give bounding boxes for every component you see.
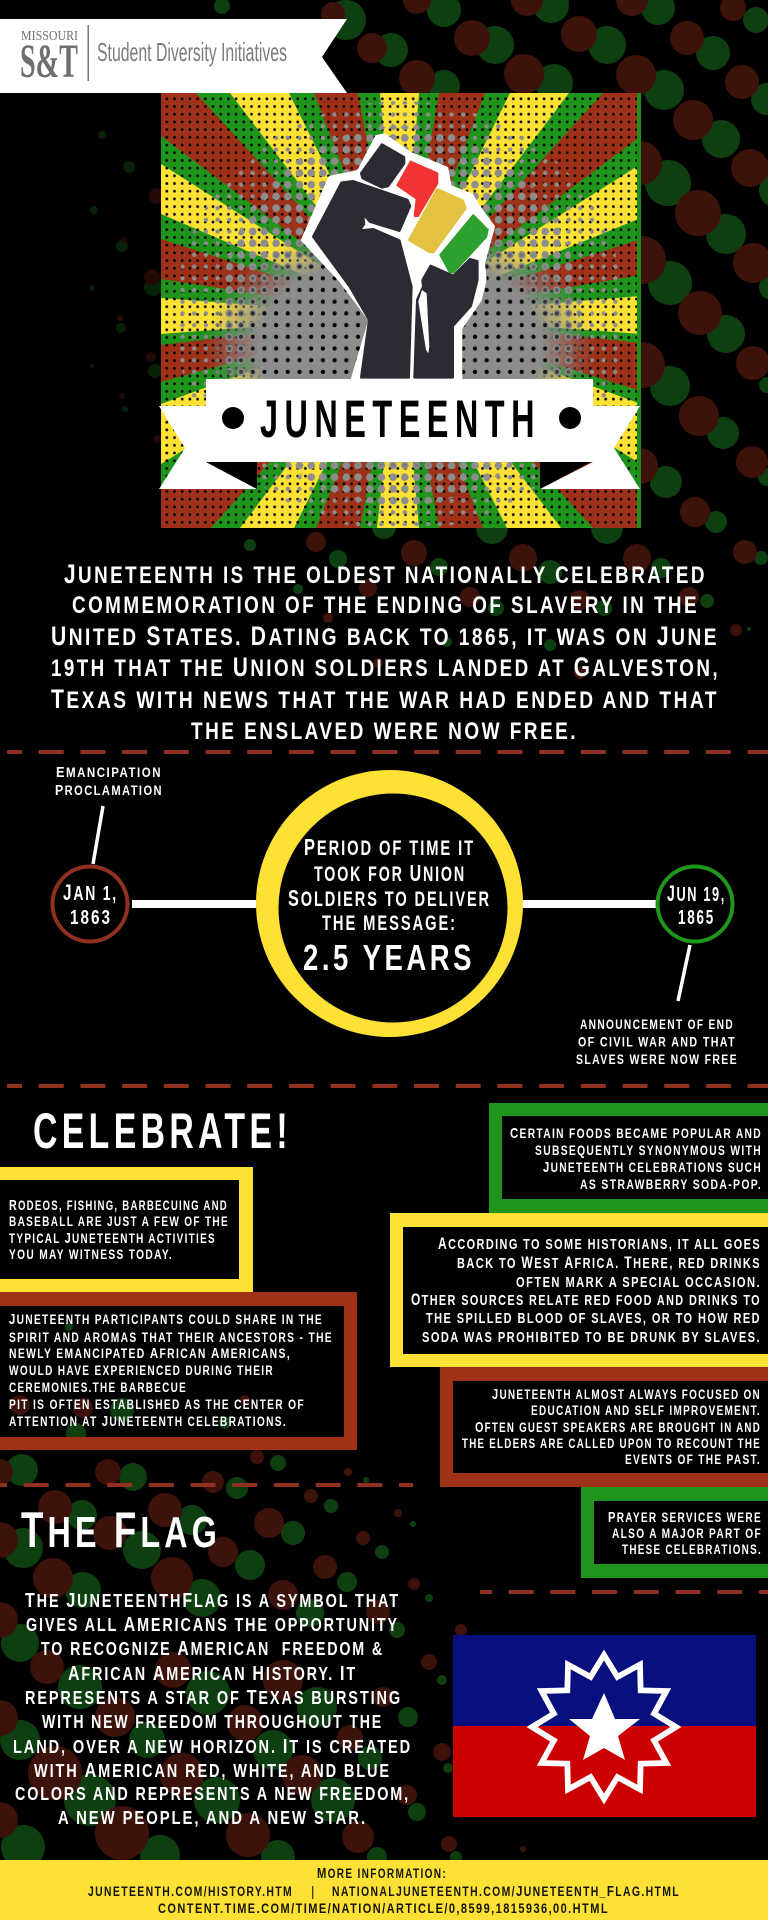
end date circle: JUN 19,	[667, 881, 726, 906]
emancipation label: PROCLAMATION	[55, 782, 163, 799]
panel: activities: RODEOS, FISHING, BARBECUING AND	[9, 1197, 228, 1214]
footer: more information	[0, 1860, 768, 1920]
start date circle	[52, 866, 128, 942]
logo: Missouri S&T: Student Diversity Initiatives	[97, 37, 287, 67]
intro paragraph: 19TH THAT THE UNION SOLDIERS LANDED AT GALVESTON,	[51, 652, 720, 682]
Juneteenth flag	[453, 1635, 756, 1817]
end date circle	[658, 866, 732, 942]
flag paragraph: WITH NEW FREEDOM THROUGHOUT THE	[42, 1711, 383, 1732]
flag paragraph	[13, 1589, 412, 1828]
central period circle	[256, 770, 523, 1037]
start date circle: 1863	[70, 907, 112, 929]
flag paragraph: REPRESENTS A STAR OF TEXAS BURSTING	[25, 1686, 402, 1709]
logo: Missouri S&T	[20, 25, 287, 88]
timeline	[52, 764, 738, 1067]
flag paragraph: WITH AMERICAN RED, WHITE, AND BLUE	[34, 1759, 391, 1782]
intro paragraph: UNITED STATES. DATING BACK TO 1865, IT WAS ON JUNE	[51, 621, 719, 651]
panel: spirit and aromas: SPIRIT AND AROMAS THAT THEIR ANCESTORS - THE	[9, 1330, 333, 1345]
panel: spirit and aromas: PIT IS OFTEN ESTABLISHED AS THE CENTER OF	[9, 1397, 305, 1412]
footer: more information: MORE INFORMATION:	[317, 1865, 447, 1882]
heading: The Flag: THE FLAG	[21, 1502, 221, 1558]
flag paragraph: TO RECOGNIZE AMERICAN FREEDOM &	[41, 1637, 384, 1660]
panel: activities: BASEBALL ARE JUST A FEW OF THE	[9, 1214, 229, 1229]
sunburst rays	[161, 93, 641, 531]
flag paragraph: GIVES ALL AMERICANS THE OPPORTUNITY	[26, 1613, 399, 1636]
footer: more information: JUNETEENTH.COM/HISTORY.HTM	[88, 1884, 293, 1899]
flag paragraph: COLORS AND REPRESENTS A NEW FREEDOM,	[15, 1783, 410, 1804]
emancipation label	[55, 764, 163, 864]
raised fist	[303, 135, 493, 378]
panel: prayer services	[581, 1487, 768, 1578]
logo ribbon	[0, 19, 347, 93]
panel: activities: YOU MAY WITNESS TODAY.	[9, 1247, 173, 1262]
flag paragraph: THE JUNETEENTHFLAG IS A SYMBOL THAT	[25, 1589, 400, 1612]
announcement label	[576, 945, 738, 1067]
panel: spirit and aromas: ATTENTION AT JUNETEENTH CELEBRATIONS.	[9, 1413, 287, 1430]
title banner: JUNETEENTH	[260, 390, 541, 449]
panel: certain foods	[489, 1103, 768, 1213]
central period circle: TOOK FOR UNION	[314, 860, 466, 886]
poster: raised fist on sunburst	[159, 93, 641, 531]
panel: spirit and aromas	[0, 1292, 357, 1450]
panel: activities: TYPICAL JUNETEENTH ACTIVITIES	[9, 1230, 216, 1247]
panel: spirit and aromas: JUNETEENTH PARTICIPANTS COULD SHARE IN THE	[9, 1311, 323, 1328]
panel: red drinks history	[390, 1213, 768, 1367]
footer: more information: CONTENT.TIME.COM/TIME/NATION/ARTICLE/0,8599,1815936,00.HTML	[158, 1901, 609, 1916]
timeline connector bars	[132, 900, 656, 908]
intro paragraph: THE ENSLAVED WERE NOW FREE.	[191, 718, 578, 745]
panel: spirit and aromas: WOULD HAVE EXPERIENCED DURING THEIR	[9, 1363, 274, 1378]
footer: more information: NATIONALJUNETEENTH.COM/JUNETEENTH_FLAG.HTML	[332, 1883, 680, 1900]
panel: education	[440, 1367, 768, 1487]
emancipation label: EMANCIPATION	[56, 764, 162, 781]
start date circle: JAN 1,	[63, 880, 118, 905]
central period circle: PERIOD OF TIME IT	[304, 834, 475, 860]
panel: activities	[0, 1167, 253, 1292]
central period circle: THE MESSAGE:	[322, 912, 457, 935]
panel: spirit and aromas: CEREMONIES.THE BARBECUE	[9, 1380, 187, 1395]
intro paragraph	[51, 559, 720, 745]
central period circle: 2.5 YEARS	[303, 937, 475, 978]
logo: Missouri S&T: S&T	[20, 35, 78, 88]
flag paragraph: AFRICAN AMERICAN HISTORY. IT	[68, 1662, 357, 1685]
end date circle: 1865	[678, 907, 715, 929]
footer: more information: |	[311, 1884, 315, 1899]
title banner	[159, 379, 640, 489]
flag paragraph: LAND, OVER A NEW HORIZON. IT IS CREATED	[13, 1735, 412, 1758]
logo: Missouri S&T: MISSOURI	[21, 29, 78, 44]
panel: spirit and aromas: NEWLY EMANCIPATED AFRICAN AMERICANS,	[9, 1345, 291, 1362]
central period circle: SOLDIERS TO DELIVER	[288, 885, 491, 911]
heading: Celebrate: CELEBRATE!	[33, 1103, 292, 1159]
flag paragraph: A NEW PEOPLE, AND A NEW STAR.	[58, 1807, 367, 1828]
